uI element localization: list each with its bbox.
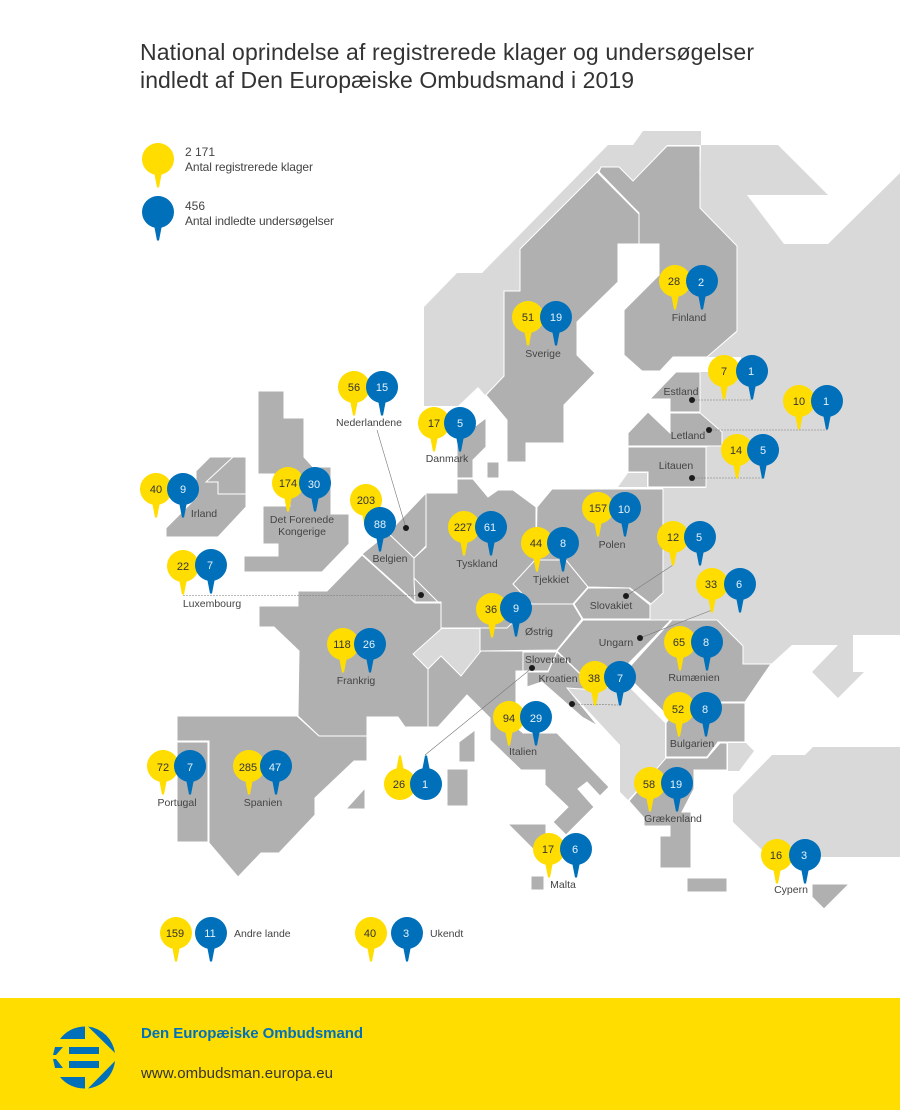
pins: Tyskland: 227 xyxy=(454,522,472,534)
country labels: Belgien xyxy=(372,553,408,565)
pins: Slovenien: 1 xyxy=(422,779,428,791)
pins: Ukendt: 40 xyxy=(364,928,376,940)
pins: Ukendt: 3 xyxy=(403,928,409,940)
pins: Tjekkiet xyxy=(521,527,579,572)
pins: Portugal xyxy=(147,750,206,794)
pins: Finland xyxy=(659,265,718,310)
pins: Ungarn: 33 xyxy=(705,579,717,591)
pins: Slovenien xyxy=(384,756,442,800)
pins: Sverige xyxy=(512,301,572,346)
country labels: Malta xyxy=(550,879,576,891)
leader lines xyxy=(183,400,827,755)
pins: Danmark xyxy=(418,407,476,452)
pins: Luxembourg: 22 xyxy=(177,561,189,573)
legend complaints xyxy=(142,143,313,188)
pins: Cypern: 3 xyxy=(801,850,807,862)
pins: Belgien xyxy=(350,484,396,552)
country labels: Kongerige xyxy=(278,526,326,538)
pins: Ungarn: 6 xyxy=(736,579,742,591)
country labels: Danmark xyxy=(426,453,469,465)
pins: Rumænien: 8 xyxy=(703,637,709,649)
pins: Det Forenede Kongerige xyxy=(272,467,331,512)
pins: Rumænien xyxy=(664,626,723,670)
pins: Litauen: 14 xyxy=(730,445,742,457)
pins: Østrig: 36 xyxy=(485,604,497,616)
pins: Portugal: 72 xyxy=(157,762,169,774)
pins: Nederlandene: 15 xyxy=(376,382,388,394)
pins: Irland xyxy=(140,473,199,518)
pins: Ukendt xyxy=(355,917,463,962)
country labels: Frankrig xyxy=(337,675,375,687)
pins: Spanien xyxy=(233,750,292,794)
map of Europe xyxy=(166,131,900,909)
pins: Østrig: 9 xyxy=(513,603,519,615)
leader dots xyxy=(403,397,712,707)
legend inquiries xyxy=(142,196,334,240)
pins: Grækenland: 19 xyxy=(670,779,682,791)
country labels: Finland xyxy=(672,312,706,324)
pins: Italien: 29 xyxy=(530,713,542,725)
country labels: Slovakiet xyxy=(590,600,632,612)
pins: Letland: 10 xyxy=(793,396,805,408)
pins: Malta: 17 xyxy=(542,844,554,856)
pins: Slovakiet: 5 xyxy=(696,532,702,544)
country labels: Cypern xyxy=(774,884,808,896)
pins: Grækenland xyxy=(634,767,693,812)
pins: Frankrig: 118 xyxy=(333,639,351,651)
pins: Slovakiet: 12 xyxy=(667,532,679,544)
pins: Belgien: 88 xyxy=(374,519,386,531)
pins: Østrig xyxy=(476,592,532,638)
pins: Spanien: 47 xyxy=(269,762,281,774)
pins: Frankrig xyxy=(327,628,386,672)
country labels: Spanien xyxy=(244,797,282,809)
pins: Grækenland: 58 xyxy=(643,779,655,791)
pins: Ukendt: Ukendt xyxy=(430,928,463,940)
pins: Polen xyxy=(582,492,641,536)
pins: Det Forenede Kongerige: 174 xyxy=(279,478,297,490)
pins: Finland: 2 xyxy=(698,277,704,289)
country labels: Slovenien xyxy=(525,654,571,666)
pins: Andre lande: 159 xyxy=(166,928,184,940)
pins: Cypern xyxy=(761,839,821,884)
country labels: Grækenland xyxy=(644,813,702,825)
pins: Kroatien: 7 xyxy=(617,673,623,685)
pins: Polen: 157 xyxy=(589,503,607,515)
pins: Bulgarien: 52 xyxy=(672,704,684,716)
non-EU countries xyxy=(413,131,900,857)
pins: Italien: 94 xyxy=(503,713,515,725)
pins: Andre lande: 11 xyxy=(204,928,216,940)
title: National oprindelse af registrerede klager og undersøgelser xyxy=(140,39,754,65)
country labels: Italien xyxy=(509,746,537,758)
pins: Slovenien: 26 xyxy=(393,779,405,791)
pins: Irland: 9 xyxy=(180,484,186,496)
legend complaints: 2 171 xyxy=(185,145,215,159)
pins: Kroatien xyxy=(579,661,636,706)
pins: Andre lande: Andre lande xyxy=(234,928,291,940)
pins: Andre lande xyxy=(160,917,291,962)
country labels: Sverige xyxy=(525,348,561,360)
country labels: Portugal xyxy=(157,797,197,809)
legend xyxy=(142,143,334,240)
pins: Polen: 10 xyxy=(618,504,630,516)
pins: Nederlandene: 56 xyxy=(348,382,360,394)
pins: Luxembourg: 7 xyxy=(207,560,213,572)
country labels: Polen xyxy=(599,539,626,551)
country labels: Rumænien xyxy=(668,672,720,684)
pins: Luxembourg xyxy=(167,549,227,594)
country labels: Tyskland xyxy=(456,558,498,570)
footer heading: Den Europæiske Ombudsmand xyxy=(141,1025,363,1042)
pins: Kroatien: 38 xyxy=(588,673,600,685)
pins: Danmark: 17 xyxy=(428,418,440,430)
pins: Estland: 1 xyxy=(748,366,754,378)
title: indledt af Den Europæiske Ombudsmand i 2019 xyxy=(140,67,634,93)
country labels xyxy=(157,312,808,896)
country labels: Nederlandene xyxy=(336,417,402,429)
legend inquiries: 456 xyxy=(185,199,205,213)
pins: Litauen: 5 xyxy=(760,445,766,457)
pins: Finland: 28 xyxy=(668,276,680,288)
pins: Estland xyxy=(708,355,768,400)
pins: Bulgarien xyxy=(663,692,722,736)
pins: Slovakiet xyxy=(657,521,716,566)
EU countries xyxy=(166,146,849,909)
country labels: Kroatien xyxy=(538,673,578,685)
pins: Irland: 40 xyxy=(150,484,162,496)
pins: Estland: 7 xyxy=(721,366,727,378)
pins: Portugal: 7 xyxy=(187,762,193,774)
country labels: Østrig xyxy=(525,626,553,638)
pins: Belgien: 203 xyxy=(357,495,375,507)
pins: Tyskland xyxy=(448,511,507,556)
country labels: Det Forenede xyxy=(270,514,334,526)
pins: Sverige: 51 xyxy=(522,312,534,324)
title xyxy=(140,39,754,93)
pins: Tjekkiet: 44 xyxy=(530,538,542,550)
legend complaints: Antal registrerede klager xyxy=(185,160,313,174)
country labels: Tjekkiet xyxy=(533,574,569,586)
pins: Tjekkiet: 8 xyxy=(560,538,566,550)
footer url: www.ombudsman.europa.eu xyxy=(140,1065,333,1082)
pins: Italien xyxy=(493,701,552,746)
pins: Bulgarien: 8 xyxy=(702,704,708,716)
pins: Danmark: 5 xyxy=(457,418,463,430)
pins: Det Forenede Kongerige: 30 xyxy=(308,479,320,491)
pins: Cypern: 16 xyxy=(770,850,782,862)
country labels: Luxembourg xyxy=(183,598,241,610)
pins: Frankrig: 26 xyxy=(363,639,375,651)
icon: European Ombudsman logo xyxy=(53,1026,115,1089)
pins: Litauen xyxy=(721,434,779,478)
country labels: Ungarn xyxy=(599,637,633,649)
pins: Spanien: 285 xyxy=(239,762,257,774)
country labels: Irland xyxy=(191,508,217,520)
pins: Sverige: 19 xyxy=(550,312,562,324)
country labels: Letland xyxy=(671,430,705,442)
pins: Malta xyxy=(533,833,592,878)
pins: Letland xyxy=(783,385,843,430)
country labels: Estland xyxy=(663,386,699,398)
pins: Tyskland: 61 xyxy=(484,522,496,534)
pins: Ungarn xyxy=(696,568,756,612)
legend inquiries: Antal indledte undersøgelser xyxy=(185,214,334,228)
pins: Letland: 1 xyxy=(823,396,829,408)
pins: Malta: 6 xyxy=(572,844,578,856)
country labels: Bulgarien xyxy=(670,738,714,750)
country labels: Litauen xyxy=(659,460,693,472)
pins: Rumænien: 65 xyxy=(673,637,685,649)
footer band xyxy=(0,998,900,1110)
pins: Nederlandene xyxy=(338,371,398,416)
